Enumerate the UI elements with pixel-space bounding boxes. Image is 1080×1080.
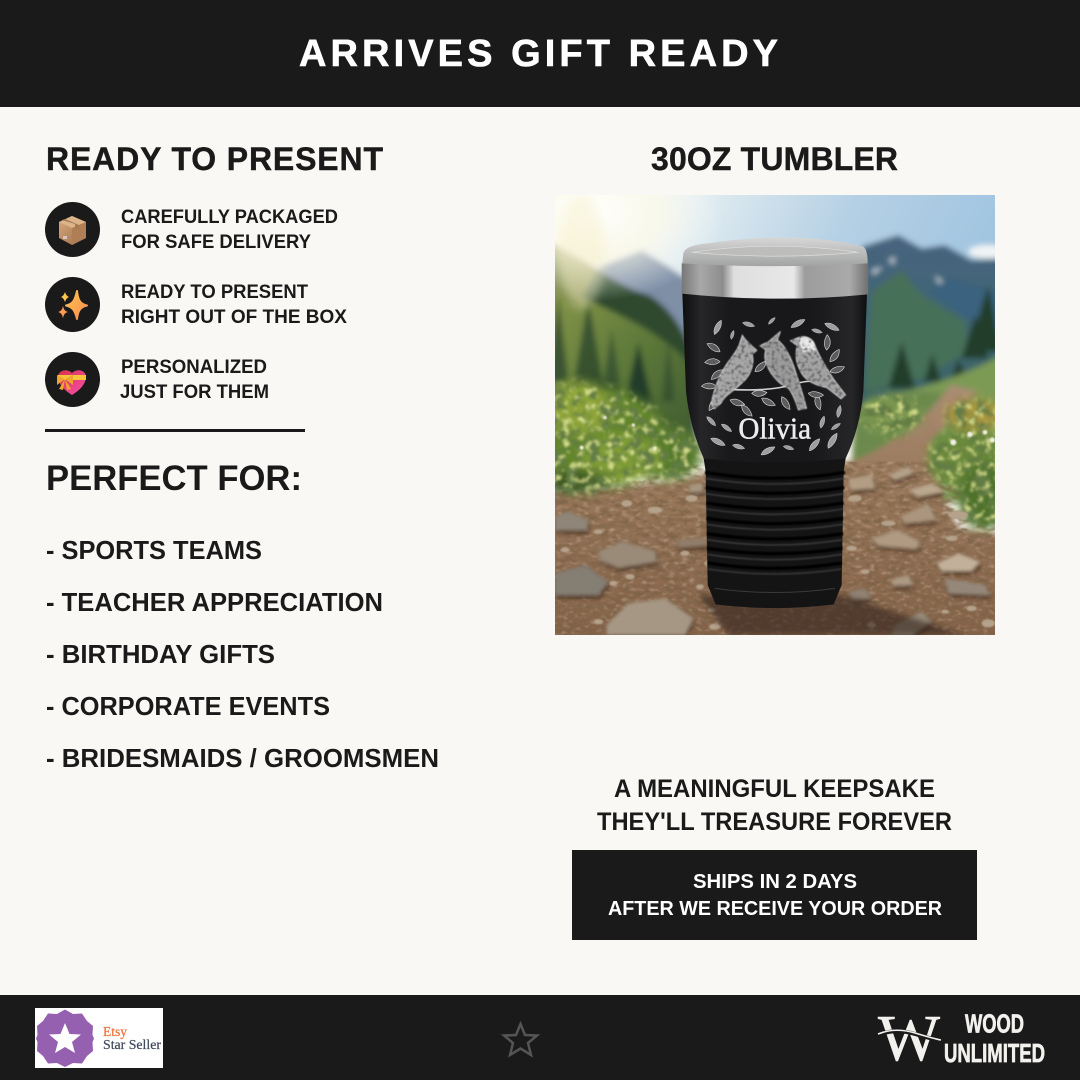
icon: sparkles xyxy=(45,277,100,332)
shipping callout: AFTER WE RECEIVE YOUR ORDER xyxy=(608,897,942,920)
feathers xyxy=(706,317,844,456)
text: personalized: JUST FOR THEM xyxy=(120,381,269,403)
list: perfect for: - SPORTS TEAMS xyxy=(46,535,262,565)
text: carefully packaged: CAREFULLY PACKAGED xyxy=(121,206,338,228)
upper body xyxy=(682,293,867,462)
heading: perfect for: PERFECT FOR: xyxy=(46,459,302,498)
text: carefully packaged: FOR SAFE DELIVERY xyxy=(121,231,311,253)
ground texture xyxy=(555,462,995,612)
text: ready to present: RIGHT OUT OF THE BOX xyxy=(121,306,347,328)
header bar xyxy=(0,0,1080,107)
name: Olivia: Olivia xyxy=(738,412,811,446)
lid xyxy=(682,238,868,266)
rocks xyxy=(555,467,990,635)
birds xyxy=(711,332,846,410)
bird left xyxy=(711,335,757,409)
bottom ribbed section xyxy=(704,458,846,608)
icon: gift heart xyxy=(45,352,100,407)
title: ARRIVES GIFT READY xyxy=(299,33,778,75)
heading: ready to present: READY TO PRESENT xyxy=(46,141,383,177)
leaves xyxy=(701,335,844,418)
keepsake message: A MEANINGFUL KEEPSAKE xyxy=(614,775,935,803)
tumbler xyxy=(682,238,868,608)
feature: carefully packaged xyxy=(45,202,338,257)
icon: star outline xyxy=(504,1024,537,1055)
blurred landscape xyxy=(555,195,995,635)
list: perfect for: - BRIDESMAIDS / GROOMSMEN xyxy=(46,743,439,773)
badge: etsy star seller: Etsy xyxy=(103,1025,127,1040)
text: personalized xyxy=(120,356,269,403)
text: personalized: PERSONALIZED xyxy=(121,356,267,378)
sun glow xyxy=(555,195,700,299)
engraving xyxy=(701,317,846,456)
feature: ready to present xyxy=(45,277,347,332)
tumbler shadow xyxy=(698,595,965,635)
pebbles xyxy=(560,495,995,630)
list: perfect for: - BIRTHDAY GIFTS xyxy=(46,639,275,669)
left bush xyxy=(532,382,702,494)
heading: 30oz tumbler: 30OZ TUMBLER xyxy=(651,141,898,177)
text: carefully packaged xyxy=(121,206,338,253)
icon: package xyxy=(45,202,100,257)
keepsake message: THEY'LL TREASURE FOREVER xyxy=(597,808,952,836)
footer bar xyxy=(0,995,1080,1080)
bird middle xyxy=(760,332,807,410)
shipping callout xyxy=(572,850,977,940)
feature: personalized xyxy=(45,352,269,407)
text: ready to present xyxy=(121,281,347,328)
badge: etsy star seller: Star Seller xyxy=(103,1038,161,1053)
right bush xyxy=(862,395,1012,528)
badge: etsy star seller xyxy=(35,1008,163,1068)
steel rim xyxy=(682,263,868,299)
logo: wood unlimited: W xyxy=(878,1002,941,1075)
photo: tumbler on mountain trail xyxy=(555,195,995,635)
logo: wood unlimited: WOOD xyxy=(965,1008,1024,1038)
logo: wood unlimited xyxy=(878,1002,1045,1075)
list: perfect for xyxy=(46,535,439,773)
list: perfect for: - CORPORATE EVENTS xyxy=(46,691,330,721)
list: perfect for: - TEACHER APPRECIATION xyxy=(46,587,383,617)
feature list xyxy=(45,202,347,407)
keepsake message xyxy=(597,775,952,836)
bird right xyxy=(790,336,846,399)
text: ready to present: READY TO PRESENT xyxy=(121,281,308,303)
shipping callout: SHIPS IN 2 DAYS xyxy=(693,870,857,893)
